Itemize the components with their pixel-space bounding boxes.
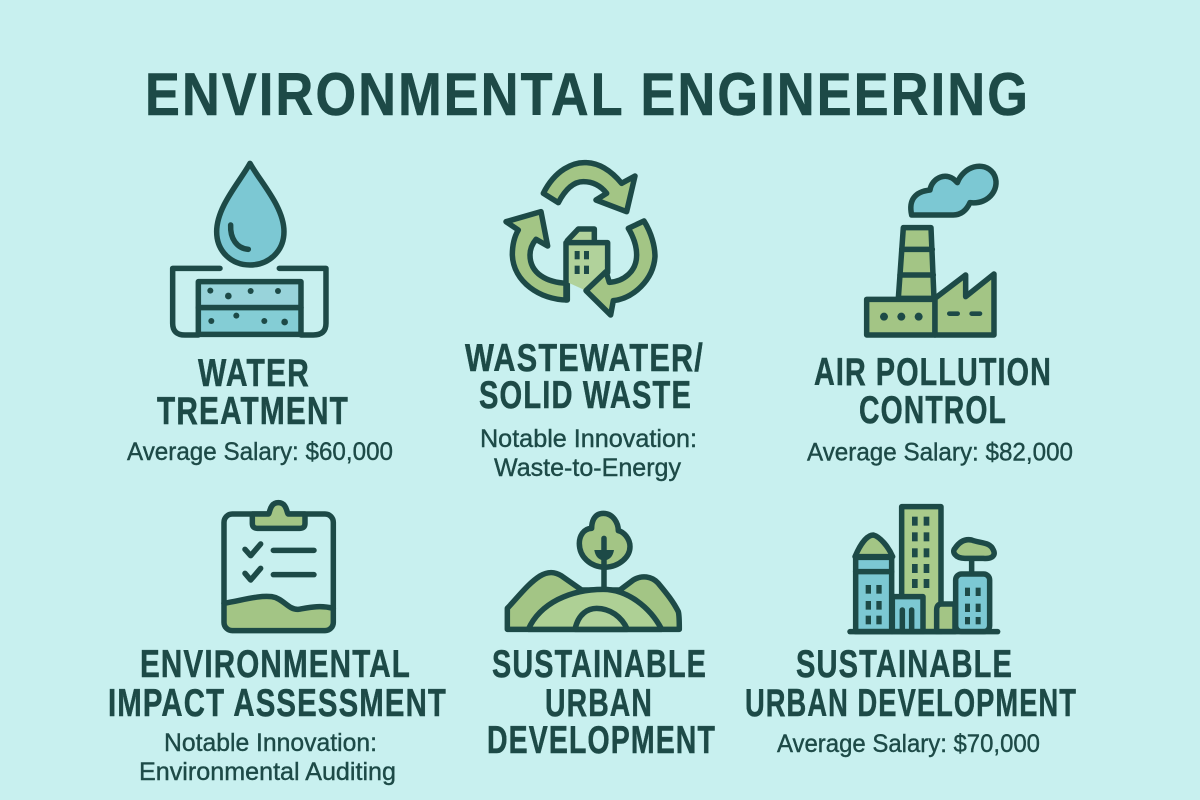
panel: wastewater and solid waste [465,163,704,482]
panel: environmental impact assessment [108,503,447,786]
innovation text: Environmental Auditing [139,758,396,786]
icon: clipboard checklist [224,503,333,631]
heading: CONTROL [859,389,1007,432]
innovation text [480,425,697,482]
heading: SOLID WASTE [479,374,692,417]
panel: sustainable urban development, landscape [487,513,716,762]
heading: URBAN DEVELOPMENT [745,682,1077,725]
innovation text: Waste-to-Energy [494,454,681,482]
panel: air pollution control [807,166,1073,466]
heading: AIR POLLUTION [814,351,1052,394]
heading [157,352,349,433]
heading: SUSTAINABLE [492,643,707,686]
innovation text: Notable Innovation: [164,729,377,757]
icon: recycling arrows around building [506,163,655,315]
heading [108,643,447,725]
salary text: Average Salary: $60,000 [127,438,393,466]
heading: IMPACT ASSESSMENT [108,682,447,725]
panel: water treatment [127,163,393,466]
panel: sustainable urban development, city [745,507,1077,758]
salary text: Average Salary: $82,000 [807,438,1073,466]
icon: tree on hills [507,513,679,629]
heading: URBAN [545,682,653,725]
heading [745,643,1077,725]
salary text: Average Salary: $70,000 [777,730,1040,758]
icon: city skyline [850,507,998,632]
heading: WATER [198,352,310,395]
heading [465,337,704,417]
icon: water drop over filter tank [173,163,326,335]
innovation text [139,729,396,786]
heading [814,351,1052,432]
heading: WASTEWATER/ [465,337,704,380]
heading: ENVIRONMENTAL [140,643,411,686]
title: ENVIRONMENTAL ENGINEERING [145,61,1030,128]
icon: factory with smoke cloud [867,166,996,335]
heading: TREATMENT [157,390,349,433]
innovation text: Notable Innovation: [480,425,697,453]
heading: DEVELOPMENT [487,719,716,762]
heading: SUSTAINABLE [796,643,1013,686]
heading [487,643,716,762]
